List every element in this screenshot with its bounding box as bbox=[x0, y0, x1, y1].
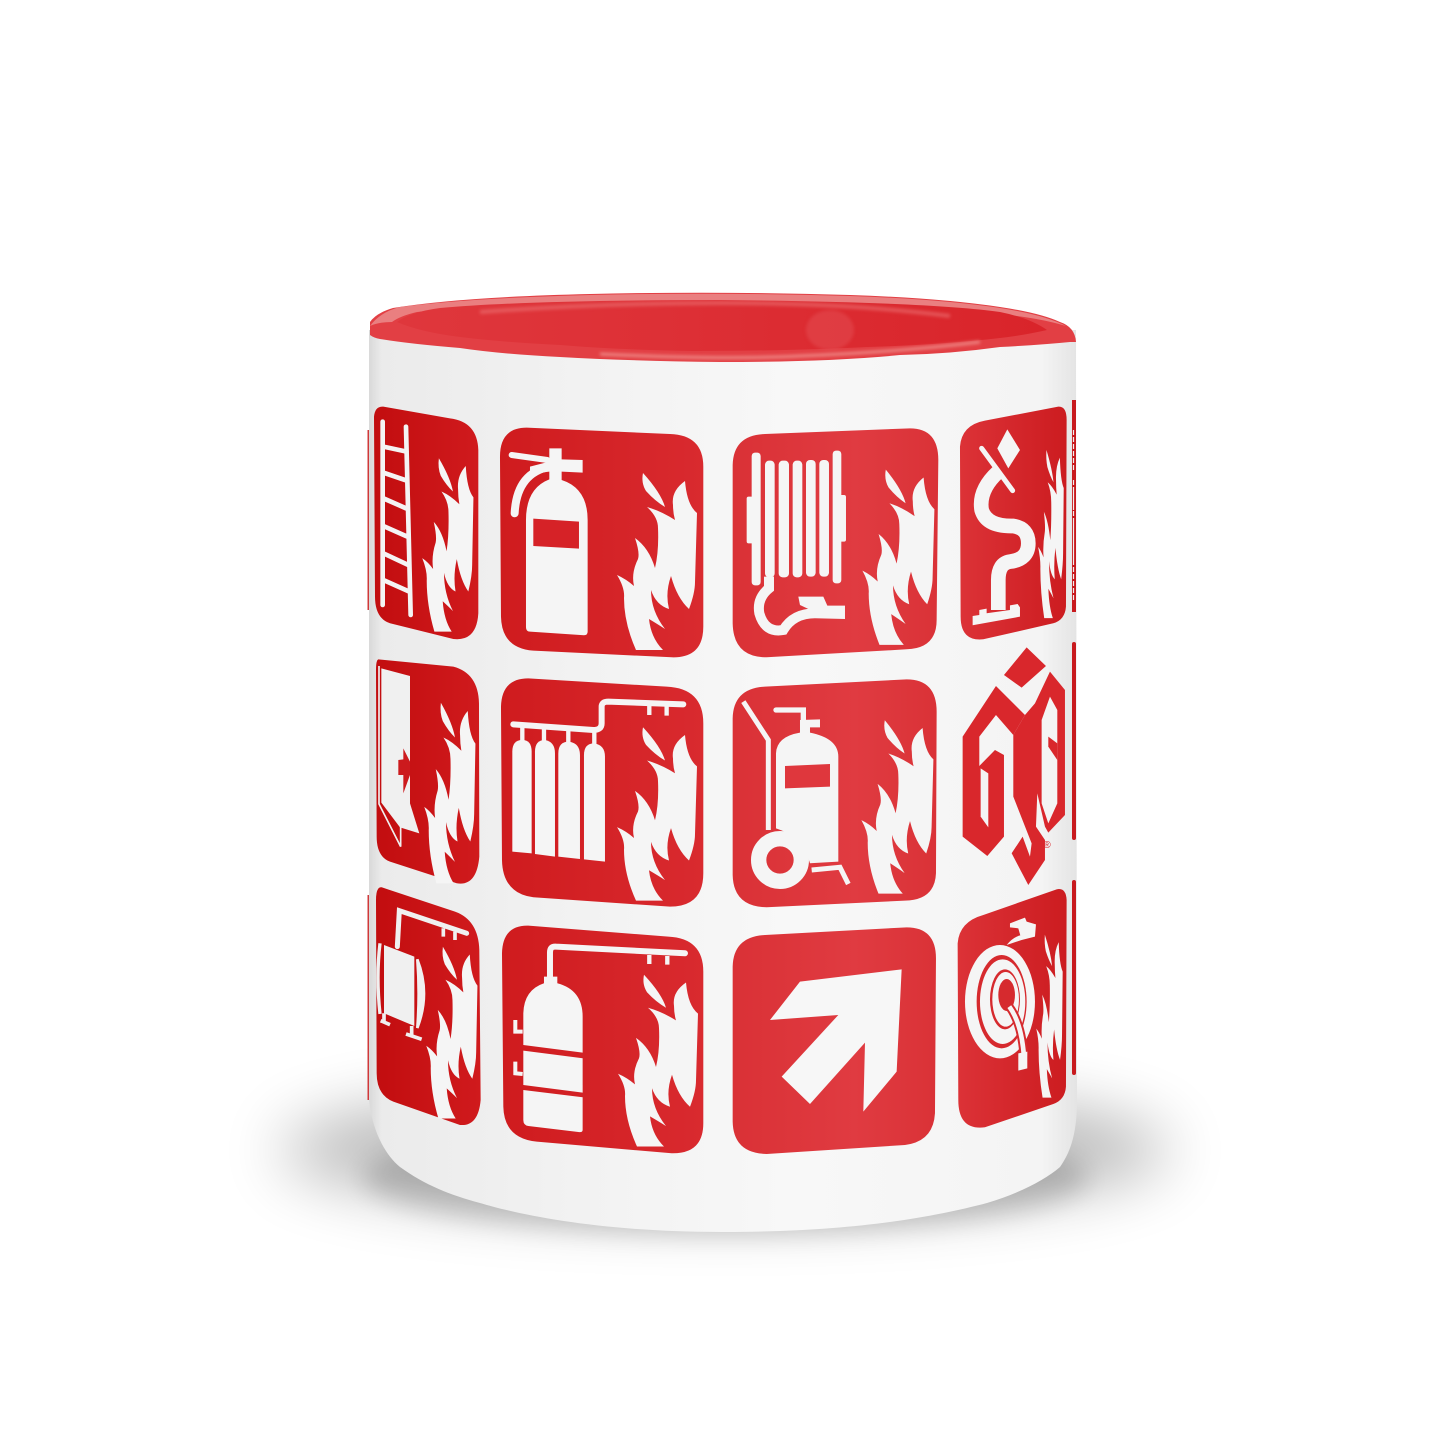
tile: wheeled extinguisher bbox=[733, 679, 937, 907]
tile: hose reel bbox=[733, 428, 938, 657]
mug red inner rim bbox=[370, 293, 1076, 362]
brand logo bbox=[963, 647, 1065, 885]
tile: fire door bbox=[376, 659, 479, 884]
tile background and hydrant bbox=[960, 407, 1067, 640]
flame bbox=[861, 720, 933, 894]
tile background and ladder bbox=[374, 407, 478, 639]
tile background and arrow bbox=[733, 927, 936, 1154]
logo letterforms bbox=[963, 647, 1065, 885]
tile: ladder bbox=[374, 407, 478, 639]
tile: gas cylinder bank bbox=[501, 678, 703, 907]
flame bbox=[426, 947, 477, 1118]
tile: gas bottle with sprinkler pipe bbox=[502, 926, 703, 1153]
tile background and coil bbox=[958, 889, 1067, 1128]
tile background and cylinders bbox=[501, 678, 703, 907]
tile: fire hydrant bbox=[960, 407, 1067, 640]
flame bbox=[422, 458, 473, 632]
rim lip bbox=[370, 293, 1076, 362]
mug body bbox=[369, 330, 1077, 1232]
tile: fire extinguisher bbox=[500, 428, 703, 657]
interior reflection band bbox=[480, 303, 950, 316]
tile: hose coil bbox=[958, 889, 1067, 1128]
tile: direction arrow bbox=[733, 927, 936, 1154]
mug interior bbox=[397, 300, 1047, 351]
flame bbox=[617, 727, 697, 901]
tile background and tank bbox=[376, 887, 481, 1125]
tile background and bottle bbox=[502, 926, 703, 1153]
tile background and extinguisher bbox=[500, 428, 703, 657]
registered mark: ® bbox=[1043, 840, 1051, 851]
tile background and trolley extinguisher bbox=[733, 679, 937, 907]
interior reflection patch bbox=[806, 310, 854, 350]
right edge slivers of wrapped tiles bbox=[1072, 400, 1076, 1075]
rim pale upper lip bbox=[370, 294, 1066, 326]
flame bbox=[1036, 935, 1063, 1098]
cast shadow under mug bbox=[280, 1088, 1170, 1234]
tile background and reel bbox=[733, 428, 938, 657]
flame bbox=[862, 470, 934, 645]
flame bbox=[424, 703, 475, 883]
flame bbox=[1038, 450, 1064, 618]
flame bbox=[618, 975, 698, 1146]
rim lower highlight bbox=[600, 342, 980, 358]
flame bbox=[617, 473, 697, 650]
left edge slivers of wrapped tiles bbox=[368, 430, 369, 1100]
tile: pressure tank bbox=[376, 887, 481, 1125]
tile background and door bbox=[376, 659, 479, 884]
